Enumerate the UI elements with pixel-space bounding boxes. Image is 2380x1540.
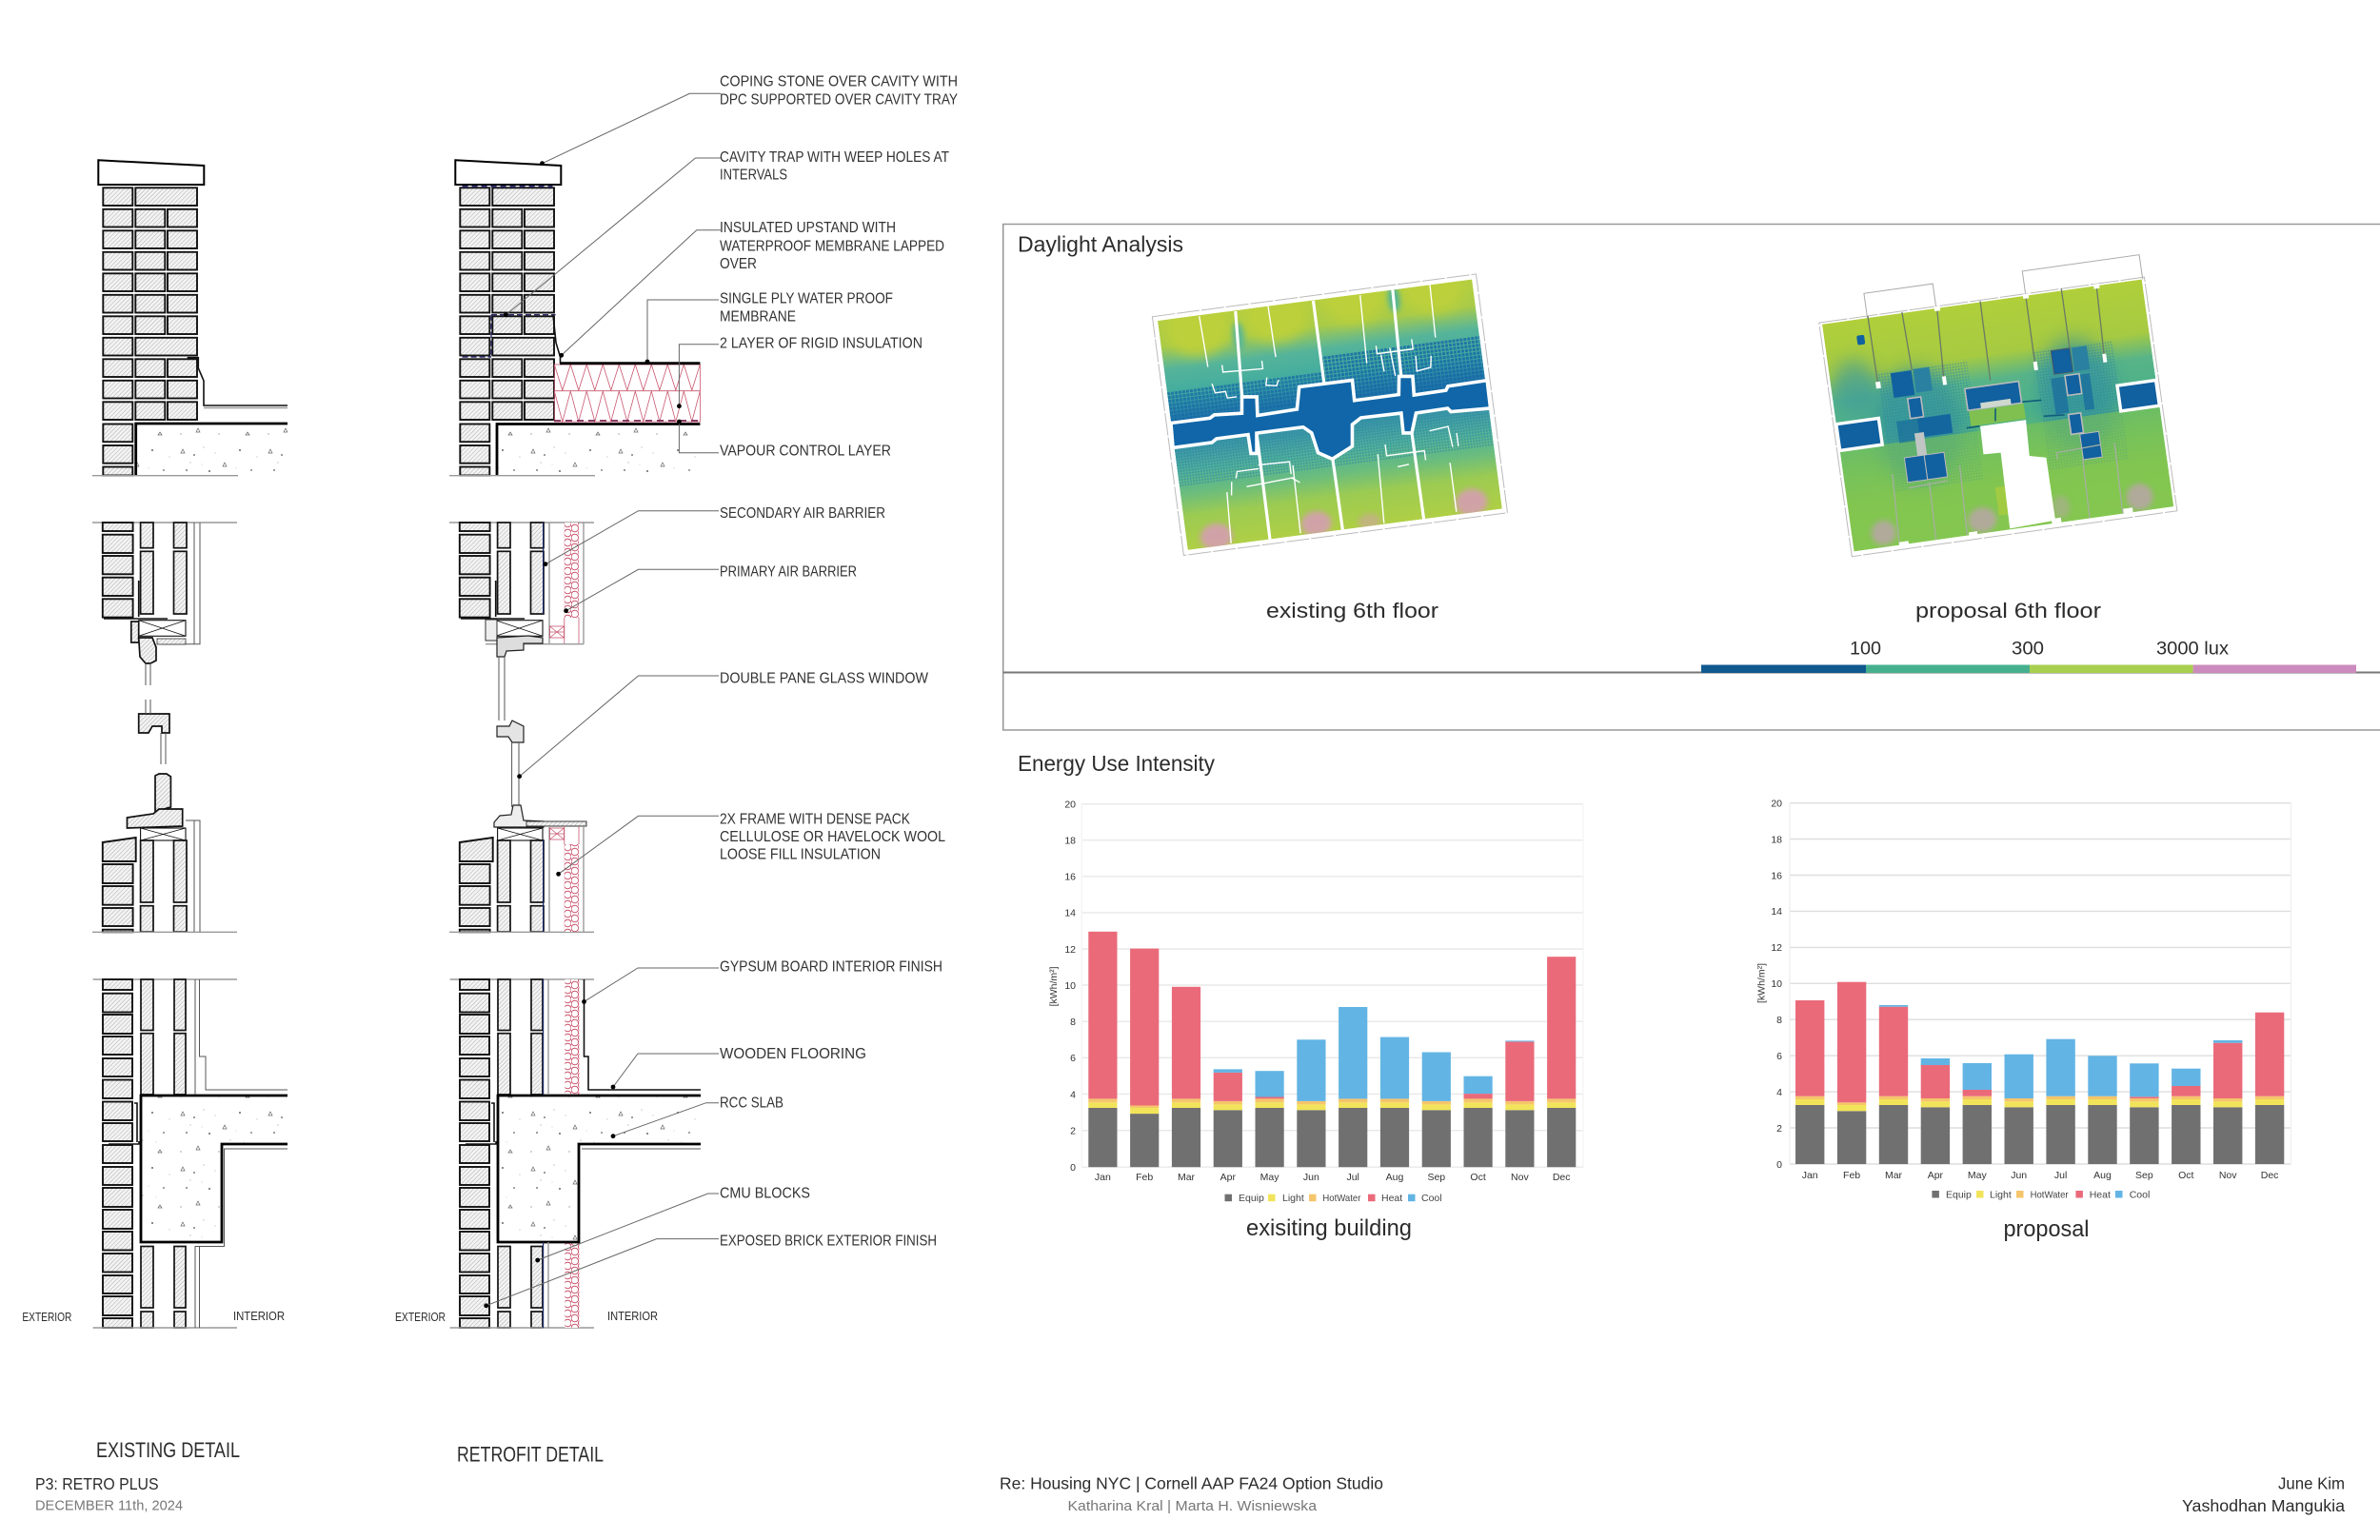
y axis labels: 14 xyxy=(1064,908,1076,919)
wall stubs xyxy=(1866,284,2133,547)
bar: Jan xyxy=(1088,932,1118,1167)
month labels: Nov xyxy=(2219,1170,2237,1181)
callout: cavity trap: CAVITY TRAP WITH WEEP HOLES AT xyxy=(720,149,949,166)
month labels: Sep xyxy=(2135,1170,2153,1181)
callout: double pane window: DOUBLE PANE GLASS WINDOW xyxy=(720,670,928,686)
y axis labels xyxy=(1771,798,1782,1171)
footer: authors xyxy=(2182,1473,2345,1515)
y axis labels: 10 xyxy=(1771,978,1782,990)
bar: Feb xyxy=(1837,982,1866,1164)
month labels: Jun xyxy=(1303,1172,1319,1183)
callout: 2x frame xyxy=(556,811,945,877)
bar: May xyxy=(1255,1071,1284,1167)
apartment blocks and shaft voids xyxy=(1824,295,2166,493)
callout: cmu blocks: CMU BLOCKS xyxy=(720,1186,810,1202)
legend bar xyxy=(1701,664,2356,673)
callout: rigid insulation xyxy=(677,335,922,408)
legend values xyxy=(1850,640,2230,659)
callout: insulated upstand: OVER xyxy=(720,256,757,272)
chart legend: Cool xyxy=(1421,1193,1442,1204)
callout: primary air barrier: PRIMARY AIR BARRIER xyxy=(720,564,857,581)
bar: Jul xyxy=(1339,1007,1367,1167)
y axis unit: [kWh/m²] xyxy=(1048,966,1060,1006)
footer: studio and instructors: Katharina Kral | Marta H. Wisniewska xyxy=(1068,1498,1318,1514)
callout: rcc slab xyxy=(611,1096,783,1138)
legend: lux scale xyxy=(1701,640,2356,673)
bar: Jul xyxy=(2046,1039,2075,1164)
bars xyxy=(1088,932,1576,1167)
callout: cavity trap: INTERVALS xyxy=(720,168,787,184)
y axis labels: 0 xyxy=(1776,1159,1782,1171)
legend values: 300 xyxy=(2012,640,2044,659)
bar: Feb xyxy=(1130,949,1159,1167)
bar: Dec xyxy=(2255,1013,2284,1164)
y axis labels: 8 xyxy=(1070,1017,1076,1028)
y axis labels: 2 xyxy=(1776,1123,1782,1135)
y axis labels: 18 xyxy=(1771,834,1782,845)
existing window section xyxy=(92,523,237,932)
caption: proposal chart: proposal xyxy=(2003,1216,2089,1242)
heading: energy use intensity: Energy Use Intensity xyxy=(1018,751,1215,776)
chart legend: Heat xyxy=(2090,1189,2111,1200)
callout: cmu blocks xyxy=(535,1186,810,1262)
month labels: Mar xyxy=(1178,1172,1196,1183)
chart legend: Heat xyxy=(1381,1193,1402,1204)
y axis labels xyxy=(1064,800,1076,1174)
month labels xyxy=(1095,1172,1571,1183)
heading: existing detail: EXISTING DETAIL xyxy=(96,1438,240,1462)
callout: single ply membrane xyxy=(645,291,893,364)
month labels: Dec xyxy=(2261,1170,2278,1181)
callout: coping stone: COPING STONE OVER CAVITY WITH xyxy=(720,74,958,90)
y axis labels: 18 xyxy=(1064,836,1076,847)
bar: Mar xyxy=(1879,1005,1908,1164)
bar: Dec xyxy=(1547,957,1576,1167)
month labels: Sep xyxy=(1427,1172,1445,1183)
y axis labels: 20 xyxy=(1064,800,1076,811)
caption: existing building: exisiting building xyxy=(1246,1215,1412,1241)
month labels xyxy=(1802,1170,2278,1181)
y axis labels: 16 xyxy=(1771,870,1782,881)
footer: project title and date: P3: RETRO PLUS xyxy=(35,1474,159,1493)
bar: Apr xyxy=(1214,1069,1242,1167)
heat map: proposal 6th floor xyxy=(1815,254,2177,557)
month labels: Nov xyxy=(1511,1172,1529,1183)
y axis labels: 20 xyxy=(1771,798,1782,809)
white courtyard void xyxy=(1979,418,2055,531)
footer: authors: June Kim xyxy=(2278,1473,2345,1492)
interior partitions xyxy=(1200,284,1467,543)
chart legend: HotWater xyxy=(2031,1189,2069,1200)
heat map: existing 6th floor xyxy=(1151,262,1507,556)
callout: secondary air barrier: SECONDARY AIR BARRIER xyxy=(720,505,885,522)
bar: Nov xyxy=(2213,1040,2242,1164)
callout: double pane window xyxy=(517,670,928,779)
bar chart: proposal xyxy=(1755,798,2291,1200)
panel: existing detail section xyxy=(22,160,288,1328)
month labels: Jan xyxy=(1095,1172,1111,1183)
y axis labels: 8 xyxy=(1776,1015,1782,1026)
y axis labels: 16 xyxy=(1064,872,1076,883)
panel: daylight analysis frame xyxy=(1003,225,2380,730)
y axis labels: 14 xyxy=(1771,906,1782,918)
gridlines xyxy=(1081,804,1583,1167)
callout: 2x frame: CELLULOSE OR HAVELOCK WOOL xyxy=(720,829,945,845)
caption: proposal 6th floor: proposal 6th floor xyxy=(1915,599,2101,622)
party walls xyxy=(1868,284,2108,396)
y axis labels: 12 xyxy=(1064,944,1076,956)
month labels: Feb xyxy=(1843,1170,1860,1181)
heading: daylight analysis: Daylight Analysis xyxy=(1018,232,1183,257)
callout: rcc slab: RCC SLAB xyxy=(720,1096,783,1112)
bar: Aug xyxy=(2088,1056,2117,1164)
month labels: Apr xyxy=(1220,1172,1236,1183)
month labels: Jul xyxy=(2054,1170,2067,1181)
y axis labels: 12 xyxy=(1771,942,1782,954)
bar: May xyxy=(1963,1063,1992,1164)
footer: project title and date xyxy=(35,1474,183,1513)
y axis labels: 10 xyxy=(1064,980,1076,992)
rigid insulation xyxy=(554,365,700,422)
bar: Jun xyxy=(1297,1039,1325,1167)
y axis unit: [kWh/m²] xyxy=(1755,963,1767,1003)
label: interior: INTERIOR xyxy=(233,1310,285,1323)
existing slab section xyxy=(93,979,288,1328)
month labels: Feb xyxy=(1136,1172,1153,1183)
callout: vapour control layer: VAPOUR CONTROL LAYER xyxy=(720,444,891,460)
panel: retrofit detail section xyxy=(395,160,701,1328)
bar: Oct xyxy=(1464,1076,1493,1167)
retrofit parapet and roof section xyxy=(449,160,701,476)
footer: studio and instructors: Re: Housing NYC | Cornell AAP FA24 Option Studio xyxy=(1000,1473,1383,1492)
callout: rigid insulation: 2 LAYER OF RIGID INSULATION xyxy=(720,335,922,351)
callout: vapour control layer xyxy=(677,420,891,460)
bar: Mar xyxy=(1172,987,1200,1167)
callout: 2x frame: 2X FRAME WITH DENSE PACK xyxy=(720,811,911,827)
chart legend xyxy=(1224,1193,1442,1204)
month labels: Aug xyxy=(2093,1170,2112,1181)
legend values: 100 xyxy=(1850,640,1881,659)
retrofit slab section xyxy=(450,979,701,1328)
callout: coping stone: DPC SUPPORTED OVER CAVITY TRAY xyxy=(720,91,958,108)
callout: exposed brick xyxy=(484,1234,937,1308)
bar: Jun xyxy=(2005,1055,2033,1164)
chart legend: Equip xyxy=(1946,1189,1972,1200)
month labels: Jan xyxy=(1802,1170,1818,1181)
callout: wooden flooring: WOODEN FLOORING xyxy=(720,1046,866,1062)
callout: secondary air barrier xyxy=(544,505,885,566)
bar: Apr xyxy=(1921,1058,1950,1164)
footer: studio and instructors xyxy=(1000,1473,1383,1514)
y axis labels: 0 xyxy=(1070,1162,1076,1174)
y axis labels: 6 xyxy=(1070,1053,1076,1064)
month labels: Mar xyxy=(1885,1170,1903,1181)
footer: project title and date: DECEMBER 11th, 2024 xyxy=(35,1498,183,1513)
bar: Aug xyxy=(1380,1037,1409,1167)
bar: Sep xyxy=(2130,1063,2159,1164)
caption: existing 6th floor: existing 6th floor xyxy=(1266,599,1438,622)
chart legend: Cool xyxy=(2130,1189,2150,1200)
chart legend: Equip xyxy=(1239,1193,1264,1204)
bar: Nov xyxy=(1505,1040,1535,1167)
month labels: May xyxy=(1260,1172,1279,1183)
corridor and core xyxy=(1167,363,1495,480)
callout: insulated upstand xyxy=(559,220,944,358)
bar: Oct xyxy=(2172,1069,2201,1164)
bar: Jan xyxy=(1795,1000,1824,1164)
chart legend xyxy=(1932,1189,2150,1200)
heading: retrofit detail: RETROFIT DETAIL xyxy=(457,1443,604,1466)
existing parapet and roof section xyxy=(92,160,288,476)
callout: insulated upstand: INSULATED UPSTAND WITH xyxy=(720,220,896,236)
callout: wooden flooring xyxy=(611,1046,866,1089)
month labels: Oct xyxy=(1470,1172,1486,1183)
callouts: material leader lines and labels xyxy=(484,74,958,1308)
callout: cavity trap xyxy=(504,149,949,317)
y axis labels: 6 xyxy=(1776,1051,1782,1062)
y axis labels: 2 xyxy=(1070,1125,1076,1136)
month labels: Jul xyxy=(1346,1172,1359,1183)
y axis labels: 4 xyxy=(1070,1089,1076,1100)
callout: 2x frame: LOOSE FILL INSULATION xyxy=(720,847,881,863)
chart legend: Light xyxy=(1990,1189,2012,1200)
chart legend: Light xyxy=(1282,1193,1304,1204)
month labels: May xyxy=(1968,1170,1987,1181)
label: exterior: EXTERIOR xyxy=(395,1311,446,1324)
month labels: Apr xyxy=(1928,1170,1944,1181)
month labels: Oct xyxy=(2178,1170,2194,1181)
bar: Sep xyxy=(1422,1053,1451,1167)
y axis labels: 4 xyxy=(1776,1087,1782,1098)
chart legend: HotWater xyxy=(1322,1193,1361,1204)
month labels: Dec xyxy=(1553,1172,1571,1183)
bars xyxy=(1795,982,2284,1164)
label: interior: INTERIOR xyxy=(607,1310,658,1323)
party walls xyxy=(1231,289,1424,541)
footer: authors: Yashodhan Mangukia xyxy=(2182,1496,2345,1515)
retrofit window section xyxy=(449,523,594,932)
callout: insulated upstand: WATERPROOF MEMBRANE LAPPED xyxy=(720,238,944,254)
lower partitions xyxy=(1890,443,2125,545)
bar chart: existing building xyxy=(1048,800,1583,1204)
callout: single ply membrane: MEMBRANE xyxy=(720,308,796,325)
legend values: 3000 lux xyxy=(2156,640,2230,659)
gridlines xyxy=(1790,803,2291,1164)
callout: single ply membrane: SINGLE PLY WATER PROOF xyxy=(720,291,893,307)
callout: gypsum board: GYPSUM BOARD INTERIOR FINISH xyxy=(720,959,942,976)
label: exterior: EXTERIOR xyxy=(22,1311,71,1324)
callout: gypsum board xyxy=(582,959,942,1004)
month labels: Jun xyxy=(2011,1170,2027,1181)
month labels: Aug xyxy=(1386,1172,1403,1183)
callout: exposed brick: EXPOSED BRICK EXTERIOR FINISH xyxy=(720,1234,937,1250)
callout: coping stone xyxy=(540,74,958,166)
callout: primary air barrier xyxy=(564,564,857,613)
